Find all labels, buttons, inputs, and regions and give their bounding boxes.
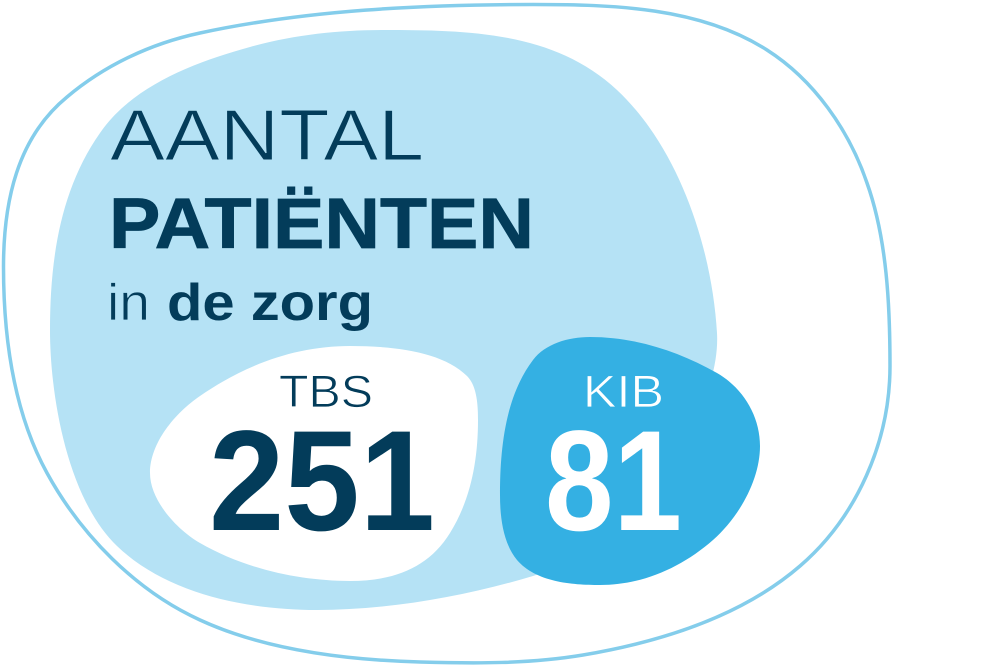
subtitle word: in: in <box>107 274 150 332</box>
KIB label: KIB <box>583 366 664 417</box>
light blue blob <box>50 30 717 610</box>
title line: PATIËNTEN: PATIËNTEN <box>109 185 534 264</box>
KIB number: 81 <box>545 402 682 561</box>
TBS number: 251 <box>209 402 435 561</box>
subtitle words: de zorg: de zorg <box>167 274 373 332</box>
white blob shape <box>150 346 478 581</box>
TBS label: TBS <box>279 366 373 417</box>
title line: AANTAL: AANTAL <box>110 95 424 176</box>
KIB card <box>500 337 760 585</box>
subtitle: in de zorg <box>107 274 373 332</box>
blue blob shape <box>500 337 760 585</box>
TBS card <box>150 346 478 581</box>
